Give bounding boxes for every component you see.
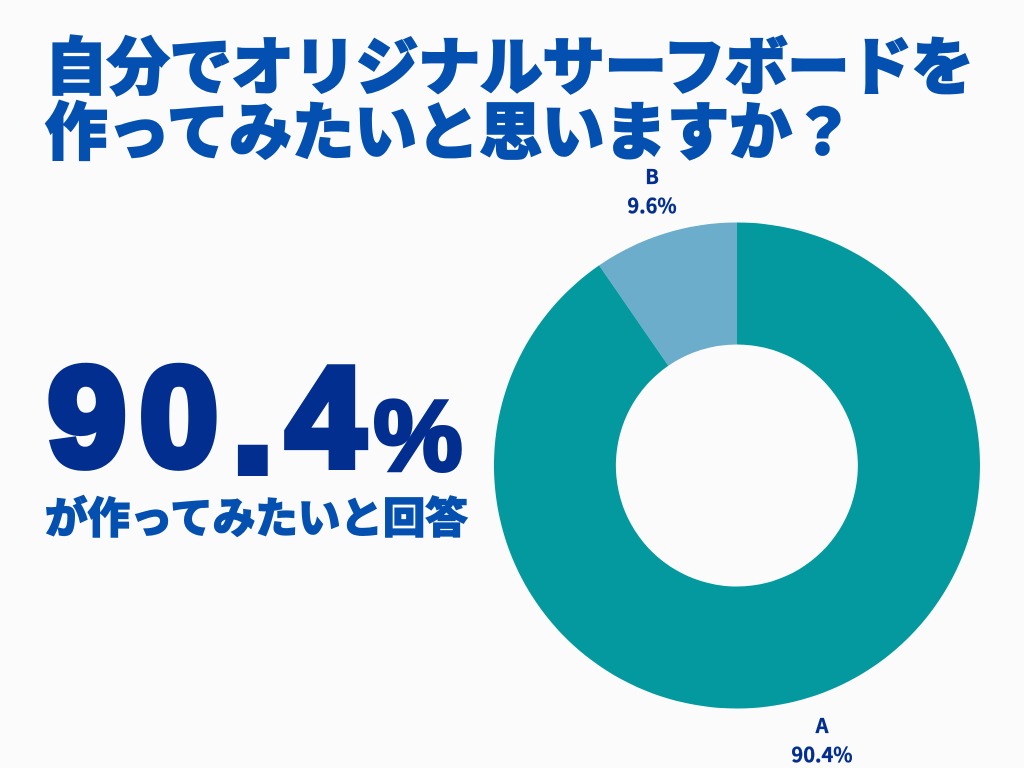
big number: 90.4%: . bbox=[226, 304, 279, 516]
label A: 90.4% bbox=[791, 739, 853, 768]
big number: 90.4%: 4 bbox=[286, 338, 365, 497]
label A: A bbox=[815, 710, 829, 739]
segment A 90.4% bbox=[494, 222, 980, 708]
segment B 9.6% bbox=[599, 222, 737, 366]
subheading: が作ってみたいと回答 bbox=[45, 495, 468, 543]
label B: 9.6% bbox=[627, 190, 677, 219]
title: 作ってみたいと思いますか？ bbox=[45, 98, 854, 168]
label B bbox=[627, 161, 677, 219]
big number: 90.4%: % bbox=[374, 380, 462, 492]
big number: 90.4%: 9 bbox=[48, 338, 126, 495]
label A bbox=[791, 710, 853, 768]
donut chart bbox=[494, 222, 980, 708]
title bbox=[45, 33, 974, 168]
label B: B bbox=[645, 161, 659, 190]
title: 自分でオリジナルサーフボードを bbox=[45, 33, 974, 103]
big number: 90.4%: 0 bbox=[140, 338, 218, 495]
big number: 90.4% bbox=[48, 304, 462, 516]
